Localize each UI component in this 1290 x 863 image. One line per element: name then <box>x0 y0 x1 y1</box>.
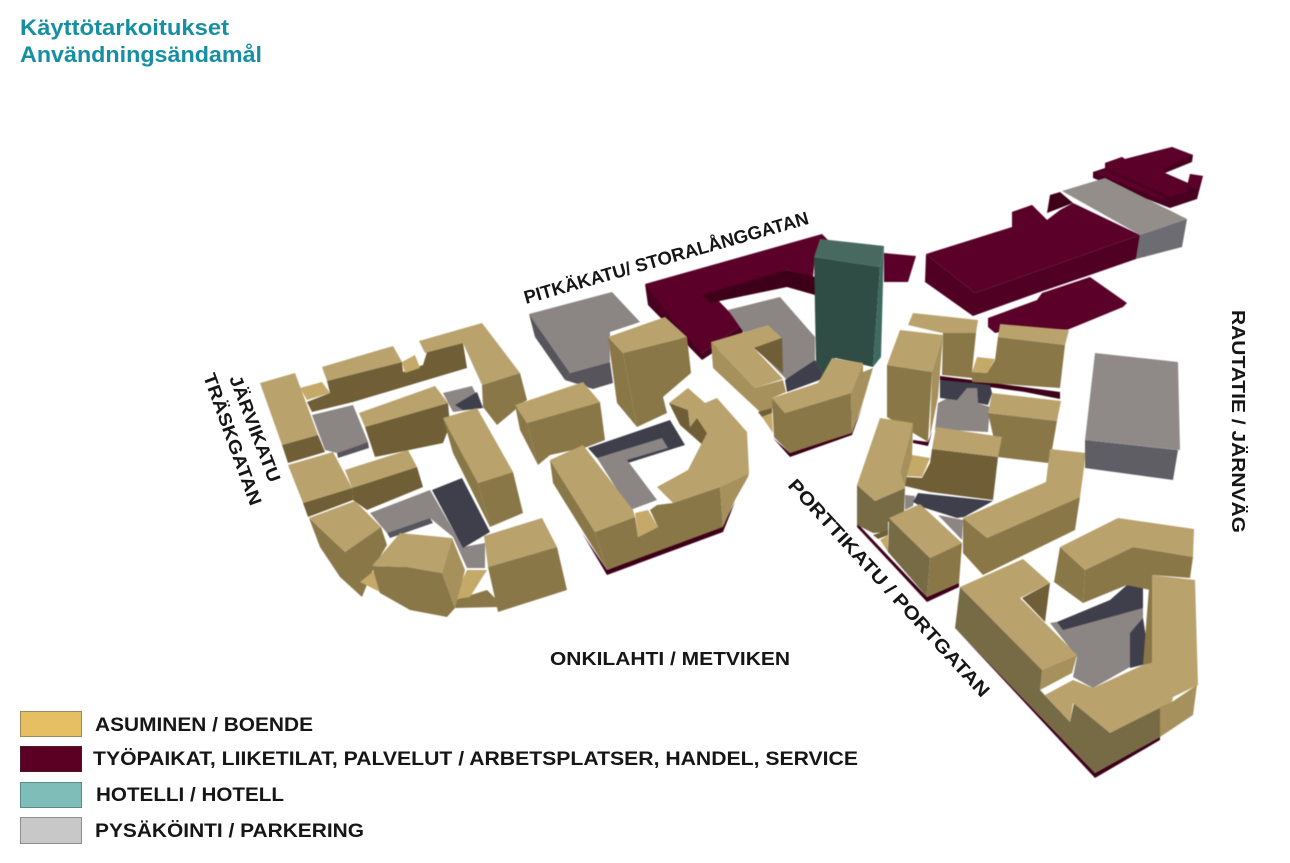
street label: Rautatie: RAUTATIE / JÄRNVÄG <box>1228 310 1249 533</box>
U-shaped building <box>550 388 749 575</box>
street label: Porttikatu: PORTTIKATU / PORTGATAN <box>784 475 994 701</box>
street label: Järvikatu: JÄRVIKATU <box>225 372 284 485</box>
north commercial buildings and parking <box>529 147 1203 392</box>
courtyard parking behind hotel <box>728 297 825 392</box>
legend item: housing <box>20 712 313 736</box>
legend item: hotel <box>20 782 284 808</box>
maroon building: L-shaped along Pitkäkatu <box>645 234 916 360</box>
long east building <box>963 449 1086 575</box>
south-east curved building <box>452 518 567 612</box>
north-east L building <box>419 323 527 425</box>
street label: Onkilahti: ONKILAHTI / METVIKEN <box>550 648 790 669</box>
small east-west bar <box>345 450 423 510</box>
courtyard parking and shadows <box>588 420 685 510</box>
legend <box>20 712 858 844</box>
main perimeter building <box>955 559 1198 773</box>
central residential quarter <box>515 317 749 575</box>
maroon base <box>955 628 1160 778</box>
eastern residential quarter <box>857 313 1086 602</box>
maroon building: main block <box>925 192 1140 316</box>
middle bar building <box>359 386 450 457</box>
central building <box>905 427 1002 500</box>
small corner building <box>888 504 962 597</box>
south-west curved building <box>309 501 387 597</box>
title <box>20 15 262 67</box>
legend item: hotel: HOTELLI / HOTELL <box>96 785 284 806</box>
street label: Pitkäkatu: PITKÄKATU/ STORALÅNGGATAN <box>521 207 811 308</box>
legend item: workplaces: TYÖPAIKAT, LIIKETILAT, PALVELUT / ARBETSPLATSER, HANDEL, SERVICE <box>93 749 858 770</box>
legend item: parking: PYSÄKÖINTI / PARKERING <box>95 821 364 842</box>
north bar with connectors <box>300 343 467 412</box>
hotel tower <box>814 239 884 378</box>
maroon building: far north-east wing <box>1093 147 1203 208</box>
north-east L wing <box>1054 518 1194 603</box>
western residential quarter <box>260 323 567 617</box>
corner building <box>772 358 873 453</box>
north-east block <box>972 324 1069 388</box>
courtyard parking and shadows <box>312 386 490 568</box>
tall central building <box>608 317 691 427</box>
title: Användningsändamål <box>20 42 262 67</box>
parking deck on main block <box>1062 178 1187 259</box>
legend item: parking <box>20 818 364 844</box>
south curved building <box>372 533 465 617</box>
west second building <box>288 452 353 517</box>
west tall building <box>887 330 943 446</box>
courtyard parking and shadows <box>1050 585 1150 688</box>
courtyard parking and shadows <box>905 376 1060 540</box>
title: Käyttötarkoitukset <box>20 15 230 40</box>
street label: Järvikatu: TRÄSKGATAN <box>199 371 266 508</box>
maroon base <box>773 405 863 457</box>
south-east residential block <box>955 518 1198 778</box>
legend item: housing: ASUMINEN / BOENDE <box>95 715 313 736</box>
east middle building <box>988 393 1061 463</box>
legend item: workplaces <box>20 746 858 772</box>
maroon building: lower wing <box>988 277 1127 333</box>
west L building <box>857 418 959 602</box>
parking building north-west <box>529 292 640 389</box>
street label: Järvikatu <box>199 371 284 508</box>
parking building east <box>1085 353 1180 480</box>
north-west bar <box>908 313 978 378</box>
block south of hotel <box>711 325 873 457</box>
L building <box>711 325 786 433</box>
long north-south building <box>443 408 523 527</box>
west bar building <box>260 373 325 463</box>
left middle building <box>515 382 605 465</box>
